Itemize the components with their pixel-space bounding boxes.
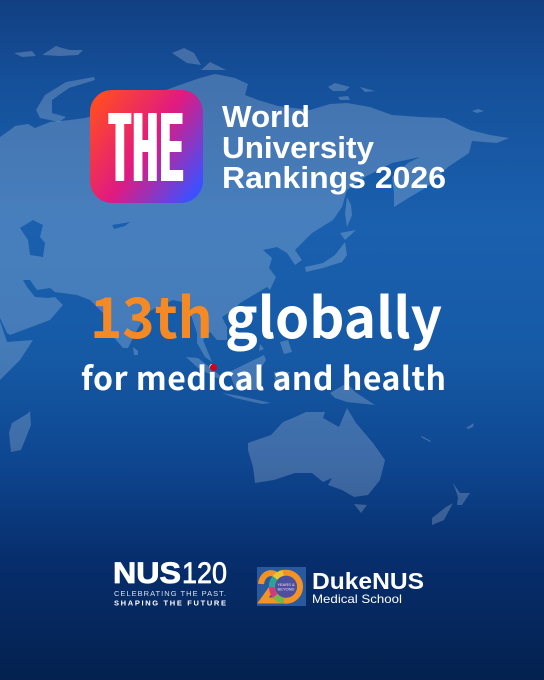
map: Sri Lanka [133, 347, 138, 355]
headline: 13th globally: 13th globally [90, 274, 442, 355]
logo: NUS120: SHAPING THE FUTURE [114, 598, 226, 608]
map: Pacific islets [421, 423, 474, 442]
map: Indonesia and Philippines [186, 340, 292, 404]
heading: World University Rankings 2026 [222, 99, 446, 195]
logo: NUS120 [113, 557, 227, 608]
map: New Guinea [330, 383, 375, 405]
logo: Duke-NUS 20 years: YEARS & [277, 582, 295, 587]
map: Australia [248, 408, 385, 497]
logo: NUS120: CELEBRATING THE PAST. [114, 589, 226, 598]
world map: Asia and Oceania [0, 46, 509, 525]
map: New Zealand [432, 483, 470, 525]
map: Japan [305, 230, 356, 272]
logo: NUS120: NUS [113, 557, 181, 590]
logo: THE square [90, 90, 203, 203]
map: Franz Josef Land [172, 48, 226, 70]
map: Africa horn [0, 321, 33, 380]
logo text: Duke NUS Medical School: Medical School [312, 592, 402, 606]
map: Tasmania [354, 504, 367, 513]
logo: Duke-NUS 20 years [257, 567, 306, 606]
logo: THE square: THE [108, 92, 185, 202]
red dot marker [210, 364, 217, 371]
logo text: Duke NUS Medical School: DukeNUS [312, 568, 424, 594]
heading: World University Rankings 2026: University [222, 130, 375, 165]
logo: Duke-NUS 20 years: BEYOND [278, 586, 295, 592]
map: Eurasian landmass [0, 74, 509, 362]
map: Svalbard islands [14, 46, 83, 57]
map: New Siberian Islands [328, 83, 484, 113]
map: Sakhalin [345, 197, 352, 227]
subheading: for medical and health: for medical and health [81, 354, 446, 400]
map: Novaya Zemlya [36, 77, 95, 122]
heading: World University Rankings 2026: World [222, 99, 310, 134]
logo: NUS120: 120 [182, 557, 227, 590]
heading: World University Rankings 2026: Rankings 2026 [222, 160, 446, 195]
logo text: Duke NUS Medical School [312, 568, 424, 606]
map: Madagascar [9, 411, 31, 452]
